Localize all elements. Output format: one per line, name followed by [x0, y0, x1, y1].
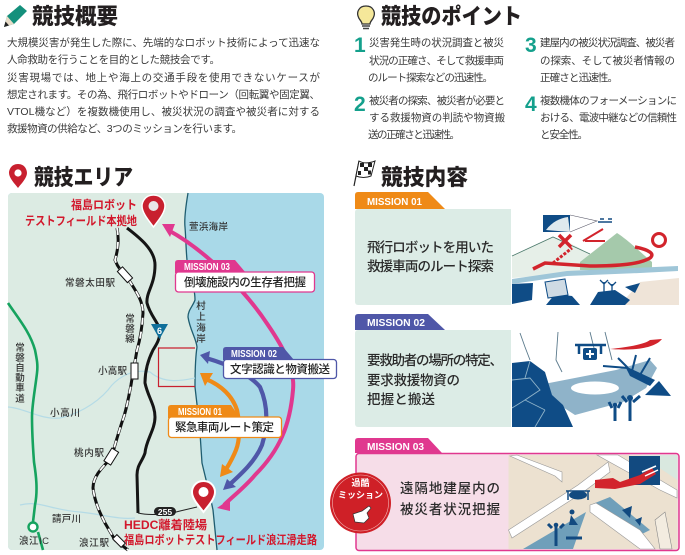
- map: place labels: 上: [196, 312, 206, 323]
- map: place labels: 線: [125, 333, 135, 345]
- point 4: [525, 93, 677, 141]
- text block: overview: 人命救助を行うことを目的とした競技会です。: [7, 53, 220, 66]
- callout: mission 02 label: MISSION 02: [231, 349, 277, 360]
- point 3: の探索、そして被災者情報の: [540, 54, 675, 67]
- callout: mission 03 label: MISSION 03: [184, 262, 230, 273]
- map: place labels: 小高駅: [98, 365, 127, 377]
- map: place labels: 常: [125, 313, 135, 325]
- badge: extreme mission: [330, 472, 391, 534]
- map pin: Fukushima Robot Test Field: [142, 195, 165, 227]
- heading: competition content: 競技内容: [381, 165, 468, 190]
- callout: mission 01 label: 緊急車両ルート策定: [175, 420, 274, 434]
- map: route 6 marker: 6: [157, 326, 162, 336]
- tab: MISSION 03: [367, 442, 424, 453]
- point 1: [354, 34, 504, 84]
- map: railway: [93, 228, 143, 550]
- callout: mission 03 label: 倒壊施設内の生存者把握: [184, 275, 306, 289]
- point 4: おける、電波中継などの信頼性: [540, 111, 677, 124]
- illustration: rescue supply: [511, 330, 679, 427]
- callout: mission 01 label: MISSION 01: [178, 407, 222, 418]
- text: [367, 352, 503, 407]
- point 1: 1: [354, 34, 366, 57]
- point 2: 被災者の探索、被災者が必要と: [369, 94, 505, 107]
- point 1: 状況の正確さ、そして救援車両: [369, 54, 504, 67]
- arrow: mission 01: [200, 373, 239, 477]
- map: rivers: [8, 371, 195, 518]
- text: 遠隔地建屋内の: [400, 481, 500, 496]
- map: station markers: [104, 267, 138, 547]
- map: base land and sea: [8, 193, 324, 550]
- text: [367, 240, 494, 274]
- text block: overview: 災害現場では、地上や海上の交通手段を使用できないケースが: [7, 71, 320, 84]
- map: place labels: 磐: [15, 352, 25, 364]
- text: 要求救援物資の: [367, 373, 460, 388]
- map: place labels: 浪江駅: [79, 537, 109, 549]
- badge: extreme mission: ミッション: [338, 490, 383, 500]
- heading: overview: 競技概要: [32, 4, 118, 29]
- tab: [355, 438, 442, 453]
- map: place labels: 小高川: [50, 407, 80, 419]
- map: route 255: 255: [158, 507, 172, 517]
- point 3: 3: [525, 34, 537, 57]
- text block: overview: VTOL機など）を複数機使用し、被災状況の調査や被災者に対する: [7, 105, 320, 118]
- badge: extreme mission: 過酷: [351, 477, 370, 488]
- point 2: 送の正確さと迅速性。: [368, 128, 460, 141]
- arrow: mission 02: [200, 351, 266, 490]
- label: Fukushima Robot Test Field base: 福島ロボット: [71, 197, 137, 212]
- tab: MISSION 01: [367, 197, 422, 208]
- callout: mission 03 label: [175, 260, 314, 292]
- map: place labels: 海: [196, 322, 206, 334]
- icon: checkered flag: [354, 161, 375, 186]
- point 1: 災害発生時の状況調査と被災: [369, 36, 504, 49]
- map: expressway: [8, 303, 43, 550]
- icon: location pin: [9, 164, 27, 188]
- map: national route 6: [127, 228, 160, 513]
- map: place labels: 道: [15, 393, 25, 405]
- map: place labels: [15, 221, 228, 549]
- map: route 6 marker: [151, 324, 168, 339]
- text: 飛行ロボットを用いた: [367, 240, 494, 255]
- icon: pencil: [4, 5, 27, 27]
- icon: pointing hand: [353, 506, 371, 523]
- map: place labels: 車: [15, 382, 25, 394]
- point 4: と安全性。: [540, 128, 588, 141]
- point 2: 2: [354, 93, 366, 116]
- icon: light bulb: [358, 6, 374, 28]
- map: place labels: 自: [15, 362, 25, 374]
- text: 被災者状況把握: [400, 502, 500, 517]
- text: 要救助者の場所の特定、: [367, 352, 503, 368]
- map pin: HEDC: [192, 481, 215, 512]
- text block: overview: 大規模災害が発生した際に、先端的なロボット技術によって迅速な: [7, 36, 320, 49]
- label: HEDC runway: [124, 517, 317, 547]
- text: 把握と搬送: [367, 392, 436, 407]
- panel: mission 03: [355, 438, 679, 550]
- point 2: [354, 93, 506, 141]
- point 3: 建屋内の被災状況調査、被災者: [540, 36, 675, 49]
- text: 救援車両のルート探索: [367, 258, 494, 274]
- point 2: する救援物資の判読や物資搬: [369, 111, 506, 124]
- map: place labels: 常: [15, 342, 25, 354]
- tab: [355, 192, 445, 209]
- map: place labels: 萱浜海岸: [189, 221, 228, 233]
- illustration: collapsed building: [508, 455, 678, 549]
- callout: mission 02 label: 文字認識と物資搬送: [230, 362, 330, 376]
- text block: overview: [7, 36, 320, 135]
- tab: MISSION 02: [367, 318, 425, 329]
- illustration: route survey: [511, 209, 679, 305]
- text block: overview: 救援物資の供給など、3つのミッションを行います。: [7, 122, 242, 135]
- map: place labels: 浪江IC: [19, 535, 49, 547]
- panel: mission 01: [355, 192, 679, 305]
- point 4: 複数機体のフォーメーションに: [540, 94, 677, 107]
- text block: overview: 想定されます。その為、飛行ロボットやドローン（回転翼や固定翼、: [7, 88, 320, 101]
- text: [400, 481, 500, 517]
- arrow: mission 03: [162, 224, 293, 511]
- point 3: 正確さと迅速性。: [540, 71, 618, 84]
- label: Fukushima Robot Test Field base: テストフィールド本拠地: [25, 213, 137, 228]
- map: place labels: 桃内駅: [74, 447, 104, 459]
- heading: key points: 競技のポイント: [381, 4, 522, 29]
- callout: mission 01 label: [168, 405, 282, 438]
- map: place labels: 磐: [125, 323, 135, 335]
- list: key points: [354, 34, 677, 141]
- point 4: 4: [525, 93, 537, 116]
- map: place labels: 常磐太田駅: [65, 277, 115, 289]
- panel: mission 02: [355, 314, 679, 427]
- label: HEDC runway: 福島ロボットテストフィールド浪江滑走路: [124, 532, 317, 547]
- map: place labels: 岸: [196, 334, 206, 345]
- map: route 255: [138, 507, 197, 517]
- map: mission target area: [158, 348, 195, 386]
- map: place labels: 村: [196, 300, 206, 312]
- tab: [355, 314, 445, 330]
- label: HEDC runway: HEDC離着陸場: [124, 517, 207, 532]
- heading: competition area: 競技エリア: [34, 165, 133, 190]
- point 3: [525, 34, 675, 84]
- map: place labels: 動: [15, 372, 25, 384]
- label: Fukushima Robot Test Field base: [25, 197, 137, 228]
- map: place labels: 請戸川: [52, 513, 81, 525]
- point 1: のルート探索などの迅速性。: [368, 71, 493, 84]
- map panel: [8, 193, 336, 550]
- callout: mission 02 label: [223, 347, 336, 378]
